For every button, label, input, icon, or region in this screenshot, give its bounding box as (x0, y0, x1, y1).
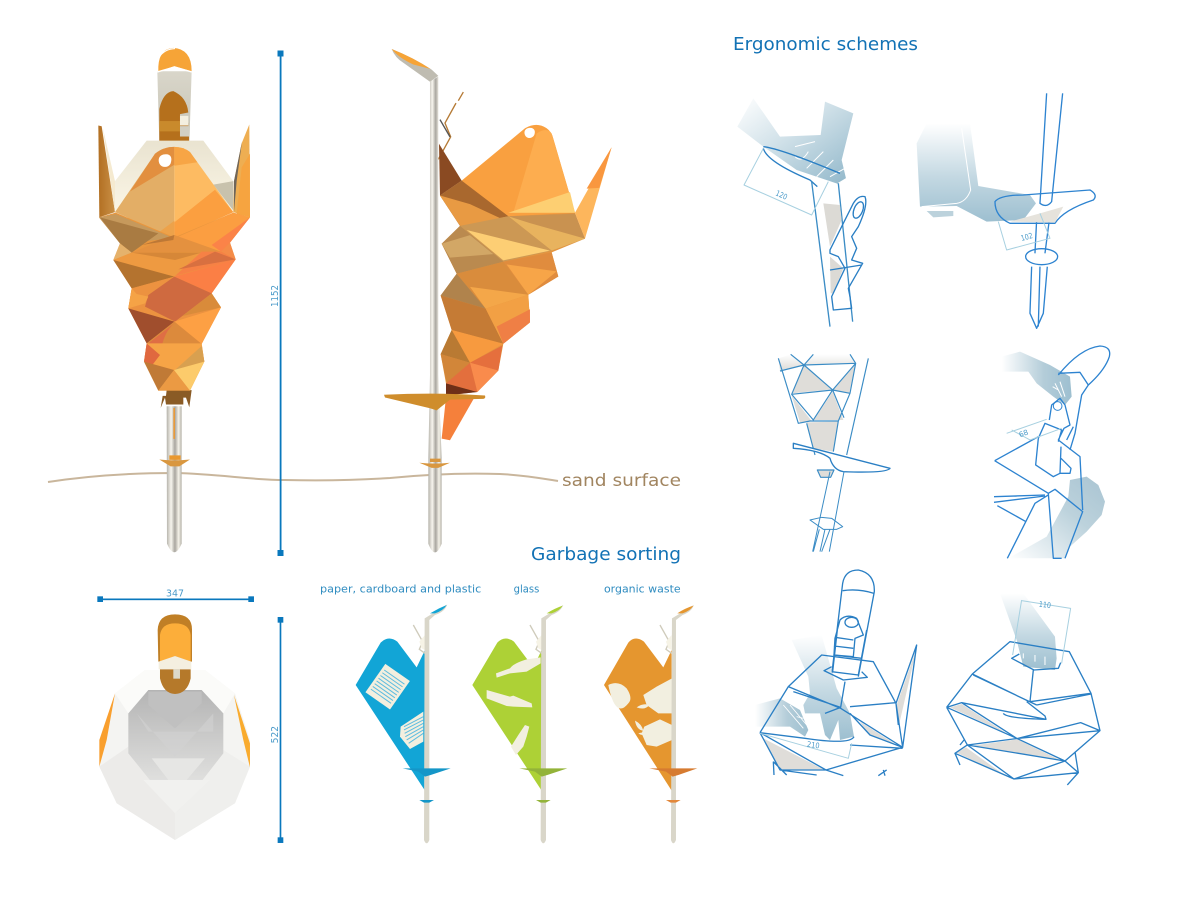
lamp orange top (392, 49, 431, 69)
finger outlines (795, 142, 847, 183)
side hook (438, 92, 463, 159)
top folded panel (115, 147, 233, 239)
bin outline (760, 645, 917, 776)
lamp (392, 49, 438, 82)
scheme: two hands on bin (755, 570, 917, 776)
dimension 210: 210 (806, 740, 820, 750)
dimension 120: 120 (774, 189, 789, 202)
heading: Garbage sorting: Garbage sorting (531, 544, 681, 565)
heading: Ergonomic schemes: Ergonomic schemes (733, 34, 918, 55)
brown hook (159, 91, 189, 152)
handle outline (763, 147, 840, 187)
orange organic bin (604, 605, 697, 843)
lower folded facets (99, 213, 250, 391)
dimension 110 (1013, 600, 1071, 665)
heel (927, 211, 953, 217)
paper sheet icon (365, 664, 410, 709)
green glass bin (472, 605, 567, 843)
dimension 102: 102 (1020, 231, 1034, 243)
pear icon (608, 683, 630, 709)
side wings (98, 124, 250, 217)
front pole (159, 406, 190, 552)
bottle icon (511, 725, 529, 755)
footrest and stake (793, 443, 890, 552)
height dimension 1152: 1152 (270, 285, 281, 307)
height dimension 1152 (270, 50, 284, 556)
hook outline (830, 196, 866, 310)
bottle icon (487, 690, 532, 707)
left hand (755, 698, 808, 737)
apple icon (642, 719, 672, 747)
dimension 120 (744, 148, 828, 215)
dimension 68: 68 (1018, 427, 1030, 439)
top view (97, 588, 283, 843)
scheme: hands on handle (994, 346, 1110, 558)
stake disc (1026, 249, 1058, 265)
hole (851, 200, 866, 220)
blue paper bin (356, 604, 451, 843)
bin facets and pole (778, 354, 868, 455)
handle neck (832, 630, 867, 675)
hook hole (1053, 402, 1062, 410)
scheme: hand into bin opening (947, 593, 1100, 785)
sand surface line (48, 473, 558, 482)
dimension 210 (760, 733, 852, 758)
scheme: footrest side view (778, 354, 890, 552)
label: organic waste: organic waste (604, 582, 681, 595)
label: sand surface: sand surface (562, 471, 681, 491)
upper hand (792, 635, 854, 740)
dimension 68 (1007, 419, 1062, 440)
finger outlines (783, 705, 807, 728)
grey fill (823, 203, 843, 293)
hand shape (737, 98, 853, 184)
side view of the bin (384, 49, 612, 552)
leaf icon (635, 721, 646, 735)
height dimension 522 (270, 617, 283, 843)
stake (1030, 267, 1047, 328)
apple hole (159, 154, 171, 167)
top view shell (99, 670, 250, 840)
back plate and cap (157, 48, 192, 143)
hand shape (1000, 593, 1057, 670)
dimension 102 (998, 213, 1050, 250)
lower hand shape (1008, 477, 1105, 558)
label: paper, cardboard and plastic: paper, cardboard and plastic (320, 582, 481, 595)
side facets (439, 125, 612, 440)
label: glass: glass (514, 582, 540, 595)
shoe edge (922, 128, 971, 207)
pedal (995, 190, 1095, 223)
side pole (428, 77, 442, 552)
footrest (384, 394, 485, 410)
foot shape (917, 123, 1036, 222)
bin opening (1012, 654, 1061, 670)
apple icon (643, 678, 672, 713)
pole lines (812, 182, 853, 327)
front view of the bin (98, 48, 250, 552)
bin lines (947, 642, 1100, 785)
bin lines and hands (755, 630, 917, 776)
hook outline (1036, 398, 1083, 510)
scheme row 1 (737, 93, 1095, 328)
bin outline (994, 437, 1083, 558)
upper handle (832, 570, 874, 677)
lamp outline (1058, 346, 1110, 450)
bin outline (947, 642, 1100, 785)
top view cavity (128, 690, 223, 813)
bin opening (824, 667, 867, 680)
scheme: foot on pedal (917, 93, 1095, 328)
arm shape (1002, 352, 1072, 405)
flange (419, 459, 450, 468)
fingers (1053, 382, 1065, 397)
width dimension 347: 347 (166, 588, 184, 599)
grey facets (950, 704, 1060, 777)
leaf icon (637, 704, 657, 709)
top view cap (158, 614, 192, 694)
grey facets (763, 648, 917, 769)
bottle icon (496, 657, 541, 678)
height dimension 522: 522 (270, 726, 281, 743)
cream back wall (115, 141, 233, 212)
front bracket (161, 390, 192, 408)
width dimension 347 (97, 588, 254, 602)
dimension 110: 110 (1038, 600, 1051, 610)
paper sheet icon (400, 712, 423, 749)
side apple hole (524, 128, 535, 138)
garbage sorting bins (320, 582, 697, 843)
pole lines (1035, 93, 1063, 253)
scheme: hand on lamp handle (737, 98, 866, 327)
